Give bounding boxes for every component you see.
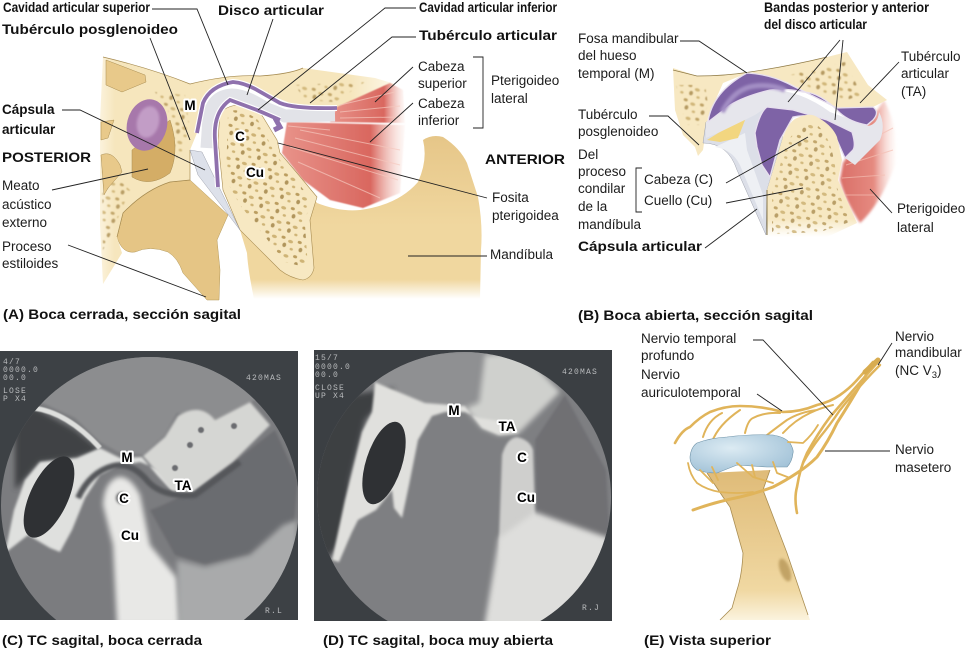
upper gray dome D (375, 350, 490, 408)
labels panel A: Cabeza (418, 59, 465, 74)
labels panel B: mandíbula (578, 217, 642, 232)
bracket (473, 57, 483, 128)
CT labels D (448, 403, 535, 505)
CT labels D: C (517, 450, 527, 465)
bone white (5, 448, 193, 553)
articular disc (690, 435, 793, 473)
condyle white (103, 477, 181, 625)
panel A: closed mouth sagittal section (52, 8, 487, 300)
TA block D (465, 352, 560, 435)
mottled dark left D (312, 388, 395, 560)
labels panel B: Bandas posterior y anterior (764, 0, 930, 15)
labels panel E: ) (937, 363, 942, 378)
labels panel A: pterigoidea (492, 208, 559, 223)
labels panel E: mandibular (895, 345, 962, 360)
labels panel B: condilar (578, 181, 626, 196)
leader lines panel A (52, 8, 487, 297)
lower bright bone D (482, 510, 606, 621)
CT labels C: M (121, 450, 133, 465)
labels panel B: Cabeza (C) (644, 172, 713, 187)
CT corner text D: CLOSE (315, 384, 345, 393)
labels panel E: 3 (932, 370, 937, 381)
labels panel A: Meato (2, 178, 40, 193)
articular capsule (190, 150, 240, 230)
temporal bone B (673, 52, 887, 156)
CT corner text (3, 358, 283, 616)
labels panel B: temporal (M) (578, 66, 655, 81)
labels panel B: Del (578, 147, 598, 162)
labels panel A (2, 0, 565, 271)
dark bone spots (172, 423, 237, 471)
labels panel B: Fosa mandibular (578, 31, 679, 46)
caption B: (B) Boca abierta, sección sagital (578, 308, 813, 323)
lower joint cavity (755, 107, 854, 177)
labels panel B: Cápsula articular (578, 239, 703, 254)
labels panel A: inferior (418, 113, 460, 128)
labels panel A: Cavidad articular inferior (419, 0, 558, 15)
label M: M (184, 98, 196, 113)
ramus (707, 470, 810, 620)
air cells (101, 60, 146, 195)
labels panel E: Nervio (641, 367, 680, 382)
labels panel B: (TA) (901, 84, 926, 99)
labels panel B (578, 0, 965, 254)
CT corner text: 0000.0 (3, 366, 39, 375)
condyle core (116, 492, 128, 504)
labels panel A: superior (418, 76, 467, 91)
upper gray dome (42, 357, 255, 455)
articular capsule B (703, 100, 783, 235)
CT corner text: LOSE (3, 387, 27, 396)
CT corner text D: UP X4 (315, 392, 345, 401)
labels panel A: Mandíbula (490, 247, 554, 262)
thin upper white arc (33, 408, 100, 448)
CT field (1, 357, 298, 620)
spongy bone condyle B (772, 125, 848, 234)
external auditory meatus (132, 120, 175, 182)
nerves behind disc (675, 362, 873, 443)
labels panel A: Disco articular (218, 3, 325, 18)
labels panel B: del disco articular (764, 17, 868, 32)
labels panel A: Cabeza (418, 96, 465, 111)
spongy bone B (676, 62, 862, 125)
labels panel E (641, 329, 962, 475)
CT corner text D: 420MAS (562, 368, 598, 377)
labels panel B: articular (901, 66, 950, 81)
right dark soft tissue (150, 430, 298, 565)
labels panel A: estiloides (2, 256, 59, 271)
labels panel A: POSTERIOR (2, 150, 91, 165)
CT labels C (119, 450, 192, 543)
labels panel E: masetero (895, 460, 951, 475)
CT corner text D: 00.0 (315, 371, 339, 380)
labels panel B: Cuello (Cu) (644, 193, 712, 208)
disc band (706, 90, 883, 165)
labels panel A: Tubérculo posglenoideo (2, 22, 178, 37)
right soft tissue D (535, 395, 610, 545)
CT corner text: P X4 (3, 395, 27, 404)
mandible (240, 136, 482, 299)
labels panel A: Cavidad articular superior (3, 0, 151, 15)
labels panel A: articular (2, 122, 56, 137)
panel C: CT closed mouth (0, 351, 298, 620)
panel E: superior view (675, 340, 892, 620)
labels panel B: proceso (578, 164, 626, 179)
CT corner text D: R.J (582, 604, 600, 613)
labels panel E: profundo (641, 348, 694, 363)
caption E: (E) Vista superior (644, 633, 772, 648)
CT labels D: M (448, 403, 460, 418)
dark ellipse D (362, 422, 406, 504)
labels panel B: lateral (897, 220, 934, 235)
depression on ramus (776, 557, 794, 583)
CT labels D: TA (498, 419, 516, 434)
labels panel A: externo (2, 215, 47, 230)
panel D: CT wide open mouth (312, 350, 615, 642)
labels panel A: Proceso (2, 239, 52, 254)
CT corner text: 4/7 (3, 358, 21, 367)
CT corner text: 420MAS (246, 374, 282, 383)
labels panel B: de la (578, 199, 608, 214)
fat triangle (707, 115, 747, 142)
mandibular condyle (218, 105, 317, 280)
capsule inner white (715, 133, 763, 220)
labels panel E: (NC V (895, 363, 932, 378)
labels panel A: acústico (2, 197, 52, 212)
labels panel A: lateral (491, 91, 528, 106)
CT labels C: Cu (121, 528, 139, 543)
CT corner text D: 15/7 (315, 354, 339, 363)
labels panel B: Tubérculo (578, 107, 638, 122)
labels panel A: Tubérculo articular (419, 28, 558, 43)
label C: C (235, 129, 245, 144)
CT labels C: C (119, 491, 129, 506)
joint discs and cavities (197, 82, 337, 187)
condyle D (498, 436, 536, 548)
CT labels C: TA (174, 478, 192, 493)
CT field D (317, 352, 611, 642)
lateral pterygoid muscle (840, 100, 896, 223)
nerves over disc (688, 360, 880, 513)
dark ellipse in canal (24, 456, 74, 538)
spongy bone of temporal (102, 82, 365, 250)
labels panel B: posglenoideo (578, 124, 658, 139)
lateral pterygoid muscle upper head (330, 83, 405, 123)
labels panel E: Nervio (895, 442, 934, 457)
CT labels D: Cu (517, 490, 535, 505)
labels panel E: Nervio temporal (641, 331, 736, 346)
condyle B (767, 115, 857, 237)
bright fossa D (332, 382, 519, 562)
labels panel A: Cápsula (2, 102, 55, 117)
lower right lighter bone (177, 520, 297, 630)
tympanic membrane (121, 95, 173, 155)
mottled air cells (15, 408, 100, 490)
labels panel B: del hueso (578, 48, 637, 63)
leader lines panel B (636, 40, 899, 248)
label Cu: Cu (246, 165, 264, 180)
upper cavity highlight (722, 86, 785, 112)
lower temporal bone and styloid process (117, 180, 228, 300)
caption D: (D) TC sagital, boca muy abierta (323, 633, 554, 648)
caption A: (A) Boca cerrada, sección sagital (3, 307, 241, 322)
joint dark band (78, 462, 240, 498)
leader lines panel E (753, 340, 892, 451)
panel B: open mouth sagittal section (636, 40, 899, 248)
upper joint cavity (708, 73, 876, 125)
muscle fibres B (842, 128, 893, 195)
temporal bone (100, 57, 395, 284)
labels panel B: Tubérculo (901, 49, 961, 64)
lateral pterygoid muscle lower head (282, 122, 405, 208)
labels panel E: auriculotemporal (641, 385, 741, 400)
CT corner text: R.L (265, 607, 283, 616)
labels panel E: Nervio (895, 329, 934, 344)
labels panel A: Fosita (492, 190, 529, 205)
CT corner text: 00.0 (3, 374, 27, 383)
caption C: (C) TC sagital, boca cerrada (2, 633, 203, 648)
CT corner text D: 0000.0 (315, 363, 351, 372)
labels panel B: Pterigoideo (897, 201, 965, 216)
labels panel A: ANTERIOR (485, 152, 565, 167)
labels panel A: Pterigoideo (491, 73, 559, 88)
muscle fibres (288, 92, 400, 198)
CT corner text D (315, 354, 600, 613)
spongy bone of condyle (226, 110, 308, 266)
